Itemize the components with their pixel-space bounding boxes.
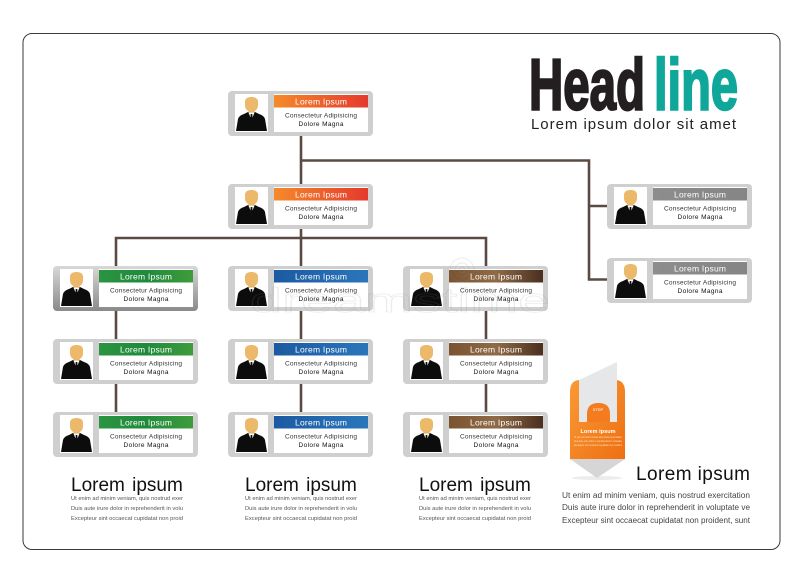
text block: right summary: Lorem ipsum [636, 464, 750, 485]
card: blue row 2: Dolore Magna [298, 369, 344, 376]
card: right staff 2: Consectetur Adipisicing [664, 280, 736, 286]
card: top executive: Dolore Magna [298, 121, 344, 128]
card: brown row 1: Consectetur Adipisicing [460, 288, 532, 294]
text block: right summary: Ut enim ad minim veniam, quis nostrud exercitation [562, 491, 750, 500]
card: second level: Dolore Magna [298, 214, 344, 221]
card: blue row 1: Lorem Ipsum [295, 272, 347, 282]
icon: orange tag badge: STEP [593, 407, 604, 412]
card: brown row 1: Lorem Ipsum [470, 272, 522, 282]
card: second level [228, 184, 373, 229]
card: green row 1: Lorem Ipsum [120, 272, 172, 282]
card: second level: Consectetur Adipisicing [285, 206, 357, 212]
card: blue row 3: Dolore Magna [298, 442, 344, 449]
card: brown row 2: Lorem Ipsum [470, 344, 522, 354]
card: brown row 3 [403, 412, 548, 457]
card: second level: Lorem Ipsum [295, 190, 347, 200]
card: blue row 1: Consectetur Adipisicing [285, 288, 357, 294]
card: right staff 1: Consectetur Adipisicing [664, 206, 736, 212]
connector lines [116, 136, 607, 412]
text block: right summary [562, 464, 751, 525]
icon: orange tag badge [570, 362, 625, 480]
card: blue row 1: Dolore Magna [298, 296, 344, 303]
title: Headline: Head [529, 46, 645, 126]
card: green row 2 [53, 339, 198, 384]
subtitle: Lorem ipsum dolor sit amet [531, 116, 737, 133]
icon: orange tag badge: Lorem ipsum [580, 429, 616, 435]
card: green row 2: Lorem Ipsum [120, 344, 172, 354]
card: right staff 1 [607, 184, 752, 229]
card: green row 1: Dolore Magna [124, 296, 169, 303]
card: blue row 2: Consectetur Adipisicing [285, 360, 357, 368]
text block: column 2: Excepteur sint occaecat cupidatat non proid [245, 516, 357, 522]
card: blue row 3: Consectetur Adipisicing [285, 434, 357, 440]
card: right staff 2: Dolore Magna [678, 288, 723, 295]
card: green row 3: Consectetur Adipisicing [110, 434, 182, 440]
watermark: dreamstime [250, 282, 550, 320]
text block: column 3: Ut enim ad minim veniam, quis nostrud exer [419, 496, 531, 502]
text block: column 3: Excepteur sint occaecat cupidatat non proid [419, 516, 531, 522]
card: green row 3: Lorem Ipsum [120, 418, 172, 428]
card: brown row 2: Consectetur Adipisicing [460, 360, 532, 368]
text block: right summary: Duis aute irure dolor in reprehenderit in voluptate ve [562, 503, 751, 512]
text block: column 2: Ut enim ad minim veniam, quis nostrud exer [245, 496, 357, 502]
card: brown row 2: Dolore Magna [474, 369, 519, 376]
text block: column 2: Lorem ipsum [245, 475, 357, 496]
card: green row 1: Consectetur Adipisicing [110, 288, 182, 294]
card: right staff 1: Lorem Ipsum [674, 190, 726, 200]
card: right staff 2: Lorem Ipsum [674, 264, 726, 274]
card: right staff 1: Dolore Magna [678, 214, 723, 221]
text block: column 3: Lorem ipsum [419, 475, 531, 496]
card: green row 1 [53, 266, 198, 311]
title: Headline: line [654, 46, 738, 126]
text block: column 1: Excepteur sint occaecat cupidatat non proid [71, 516, 183, 522]
card: blue row 2: Lorem Ipsum [295, 344, 347, 354]
text block: column 2: Duis aute irure dolor in reprehenderit in volu [245, 506, 357, 512]
text block: column 3 [419, 475, 531, 522]
card: green row 2: Consectetur Adipisicing [110, 360, 182, 368]
card: brown row 1 [403, 266, 548, 311]
icon: orange tag badge: Duis aute irure dolor in reprehenderit in voluptate [574, 439, 622, 443]
card: top executive [228, 91, 373, 136]
icon: orange tag badge: Ut enim ad minim veniam quis nostrud exercitation [574, 435, 622, 439]
card: top executive: Consectetur Adipisicing [285, 112, 357, 120]
card: green row 2: Dolore Magna [124, 369, 169, 376]
text block: column 1: Ut enim ad minim veniam, quis nostrud exer [71, 496, 183, 502]
card: brown row 3: Dolore Magna [474, 442, 519, 449]
card: green row 3 [53, 412, 198, 457]
card: blue row 2 [228, 339, 373, 384]
card: blue row 1 [228, 266, 373, 311]
text block: column 2 [245, 475, 357, 522]
text block: column 1 [71, 475, 183, 522]
card: blue row 3 [228, 412, 373, 457]
card: green row 3: Dolore Magna [124, 442, 169, 449]
watermark [250, 258, 550, 320]
card: brown row 3: Lorem Ipsum [470, 418, 522, 428]
card: top executive: Lorem Ipsum [295, 96, 347, 106]
text block: column 3: Duis aute irure dolor in reprehenderit in volu [419, 506, 531, 512]
card: blue row 3: Lorem Ipsum [295, 418, 347, 428]
card: brown row 1: Dolore Magna [474, 296, 519, 303]
icon: orange tag badge: Excepteur sint occaecat cupidatat non proident [574, 443, 622, 447]
text block: right summary: Excepteur sint occaecat cupidatat non proident, sunt [562, 516, 751, 525]
text block: column 1: Lorem ipsum [71, 475, 183, 496]
card: right staff 2 [607, 258, 752, 303]
text block: column 1: Duis aute irure dolor in reprehenderit in volu [71, 506, 183, 512]
card: brown row 2 [403, 339, 548, 384]
card: brown row 3: Consectetur Adipisicing [460, 434, 532, 440]
